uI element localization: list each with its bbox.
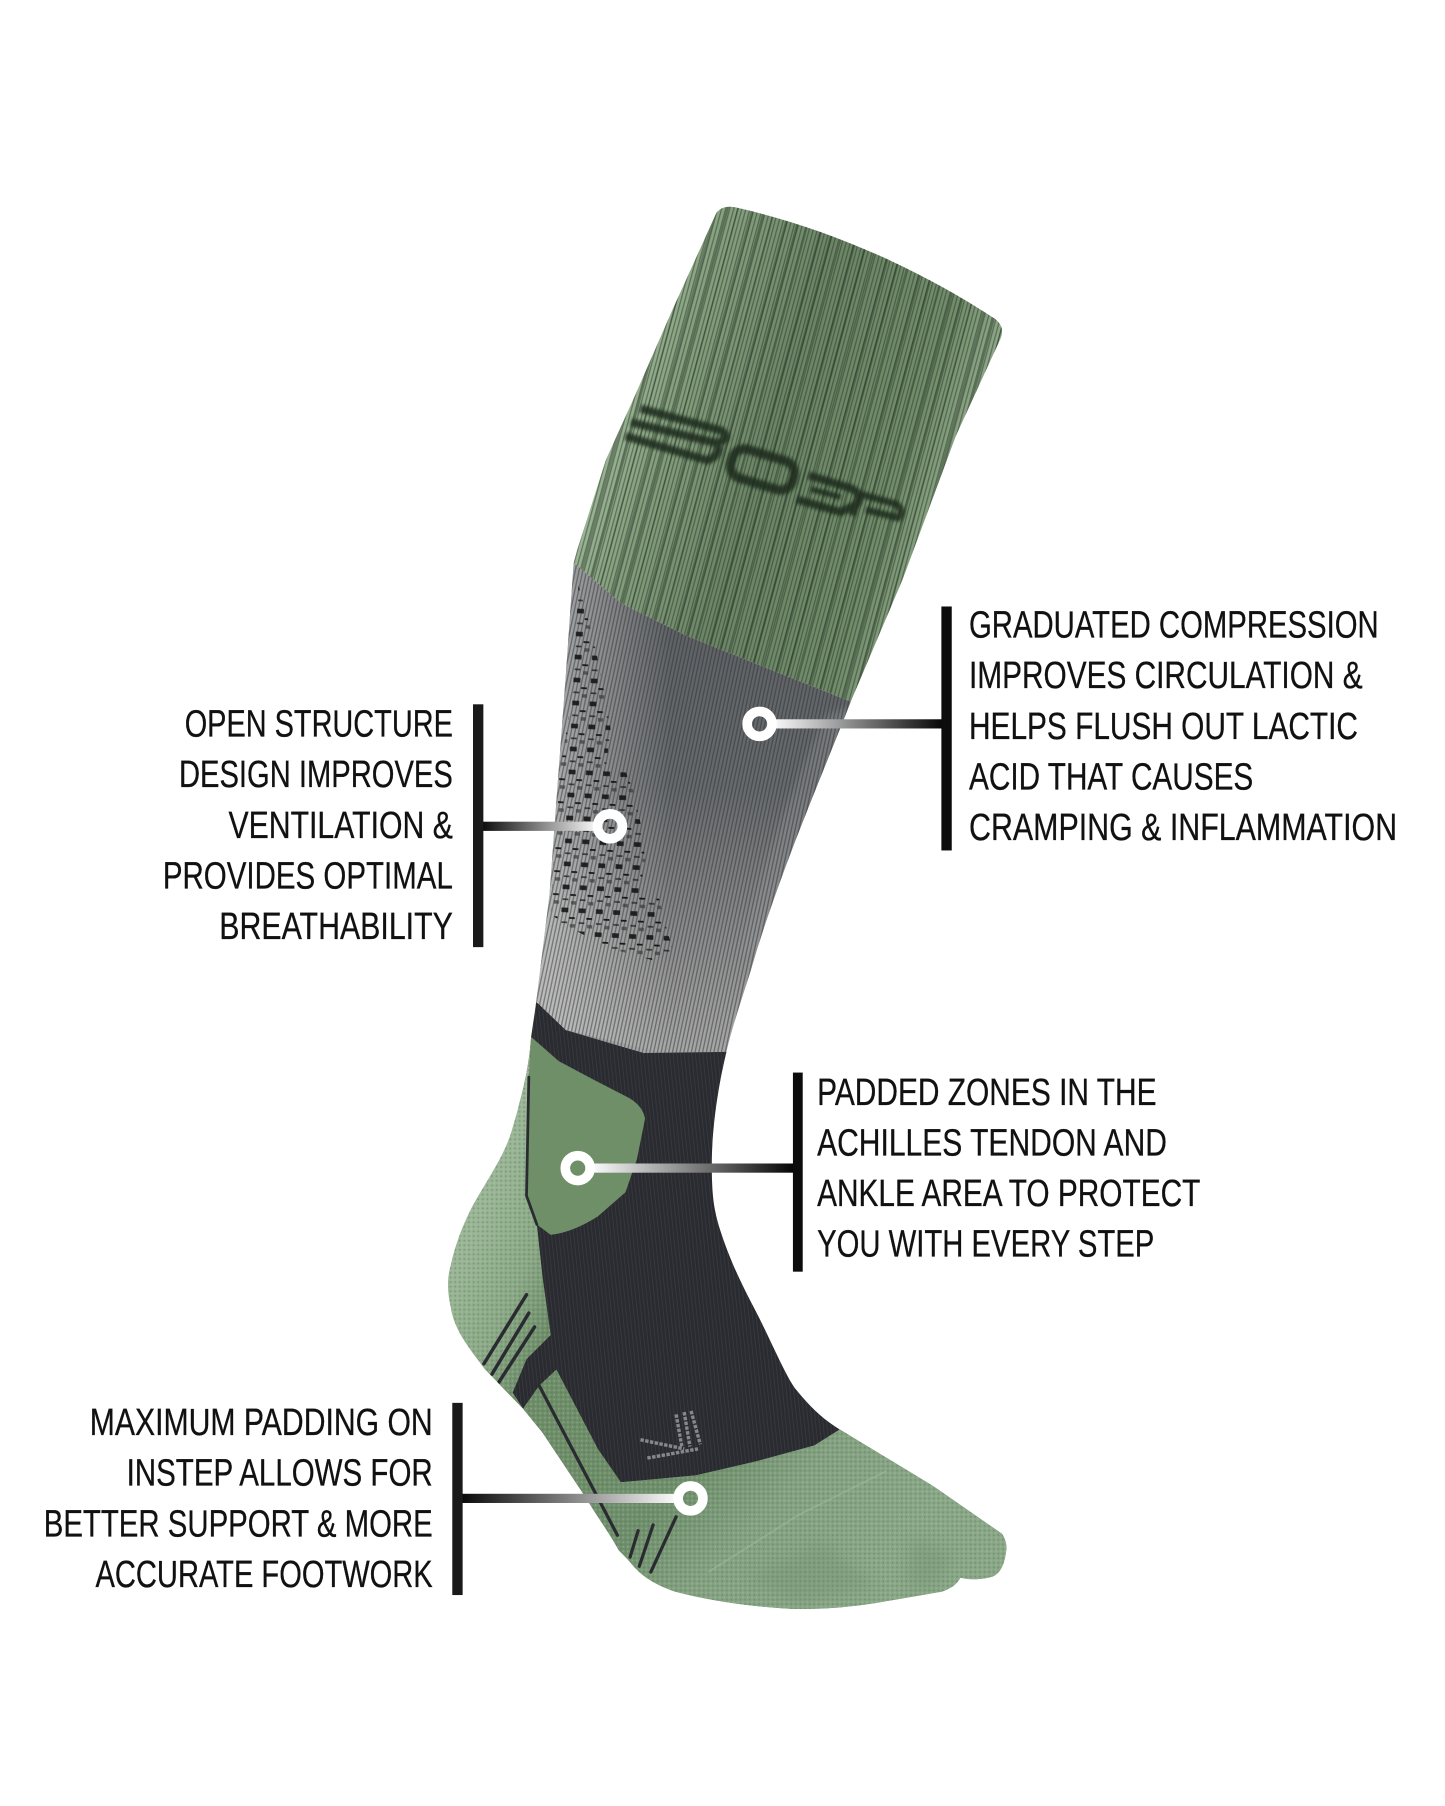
text block: BETTER SUPPORT & MORE (44, 1503, 433, 1545)
cuff logo (625, 409, 901, 518)
marker ring (747, 711, 772, 736)
callout: padded zones (565, 1072, 1200, 1272)
text block: PADDED ZONES IN THE (817, 1072, 1157, 1114)
text block: ACID THAT CAUSES (969, 756, 1253, 798)
infographic canvas (46, 206, 1395, 1609)
text block (163, 704, 453, 948)
upper green compression band (574, 185, 1016, 703)
ankle pad (527, 1037, 645, 1235)
grey ventilated calf zone (536, 562, 851, 1070)
text block: OPEN STRUCTURE (185, 704, 453, 746)
small foot logo (640, 1411, 700, 1458)
seam and stripes (484, 1077, 676, 1572)
marker ring (598, 814, 622, 839)
text block: VENTILATION & (228, 805, 453, 847)
text block: DESIGN IMPROVES (179, 754, 453, 796)
text block: YOU WITH EVERY STEP (817, 1224, 1154, 1266)
vertical bar (473, 704, 483, 947)
callout: graduated compression (747, 605, 1397, 850)
text block: INSTEP ALLOWS FOR (127, 1453, 433, 1495)
text block (817, 1072, 1200, 1266)
leader line (458, 1494, 680, 1503)
text block (44, 1402, 433, 1596)
leader line (588, 1163, 794, 1173)
leader line (770, 719, 944, 728)
marker ring (565, 1156, 590, 1181)
open structure perforations (551, 585, 673, 961)
vertical bar (793, 1073, 803, 1272)
vertical bar (452, 1403, 463, 1595)
text block: MAXIMUM PADDING ON (90, 1402, 433, 1444)
sock illustration (417, 185, 1016, 1635)
toe seam and shading (708, 1471, 887, 1572)
text block: ANKLE AREA TO PROTECT (817, 1173, 1200, 1215)
vertical bar (941, 606, 952, 850)
text block: ACHILLES TENDON AND (817, 1122, 1167, 1164)
marker ring (678, 1486, 703, 1511)
heel green padding (448, 1039, 1006, 1609)
text block (969, 605, 1397, 849)
text block: PROVIDES OPTIMAL (163, 855, 453, 897)
leader line (479, 822, 600, 831)
callout: maximum padding (44, 1402, 703, 1596)
text block: ACCURATE FOOTWORK (96, 1554, 433, 1596)
callout: open structure design (163, 704, 622, 948)
dark ankle and instep (498, 998, 855, 1497)
text block: BREATHABILITY (219, 906, 453, 948)
